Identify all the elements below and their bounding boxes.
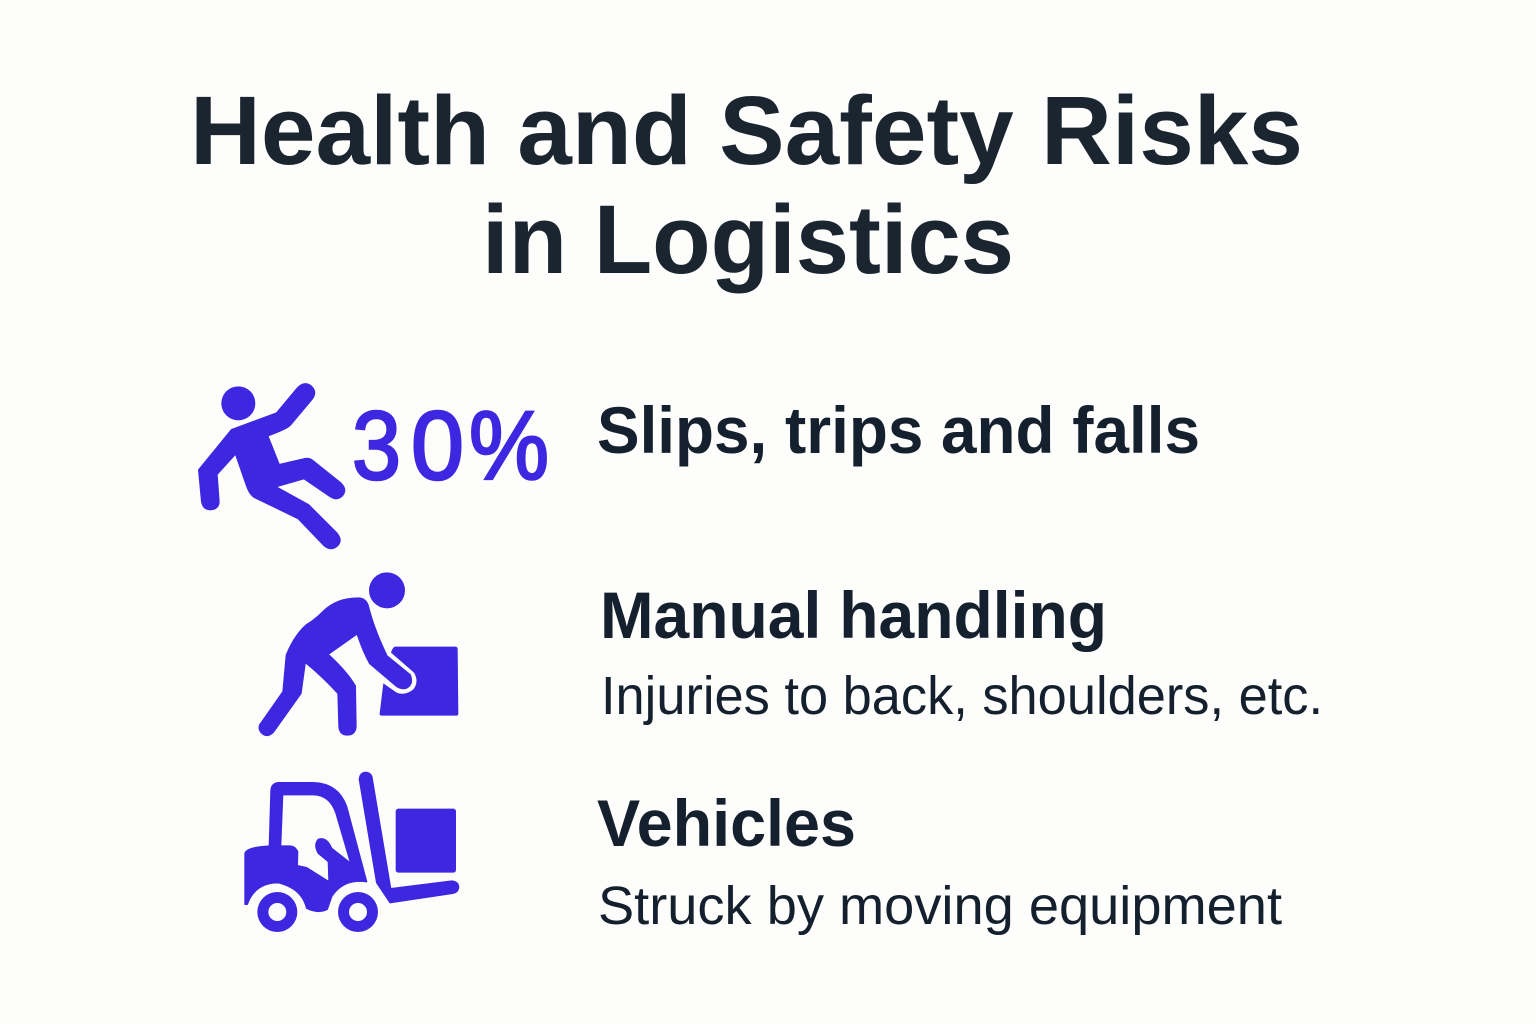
heading: manual handling: Manual handling xyxy=(600,578,1107,652)
title: Health and Safety Risks xyxy=(190,76,1303,185)
text: injuries description: Injuries to back, shoulders, etc. xyxy=(601,666,1323,726)
stat: 30% xyxy=(352,391,549,500)
icon: person lifting box xyxy=(259,572,458,735)
stat: 30%: 3 xyxy=(352,391,401,500)
icon: falling person xyxy=(199,384,344,548)
heading: slips, trips and falls: Slips, trips and falls xyxy=(597,393,1200,467)
icon: forklift xyxy=(245,772,459,932)
stat: 30%: 0 xyxy=(411,391,464,500)
title: in Logistics xyxy=(482,185,1014,294)
stat: 30%: % xyxy=(469,391,549,500)
text: vehicles description: Struck by moving equipment xyxy=(598,876,1282,936)
title xyxy=(190,76,1303,294)
heading: vehicles: Vehicles xyxy=(597,786,856,860)
